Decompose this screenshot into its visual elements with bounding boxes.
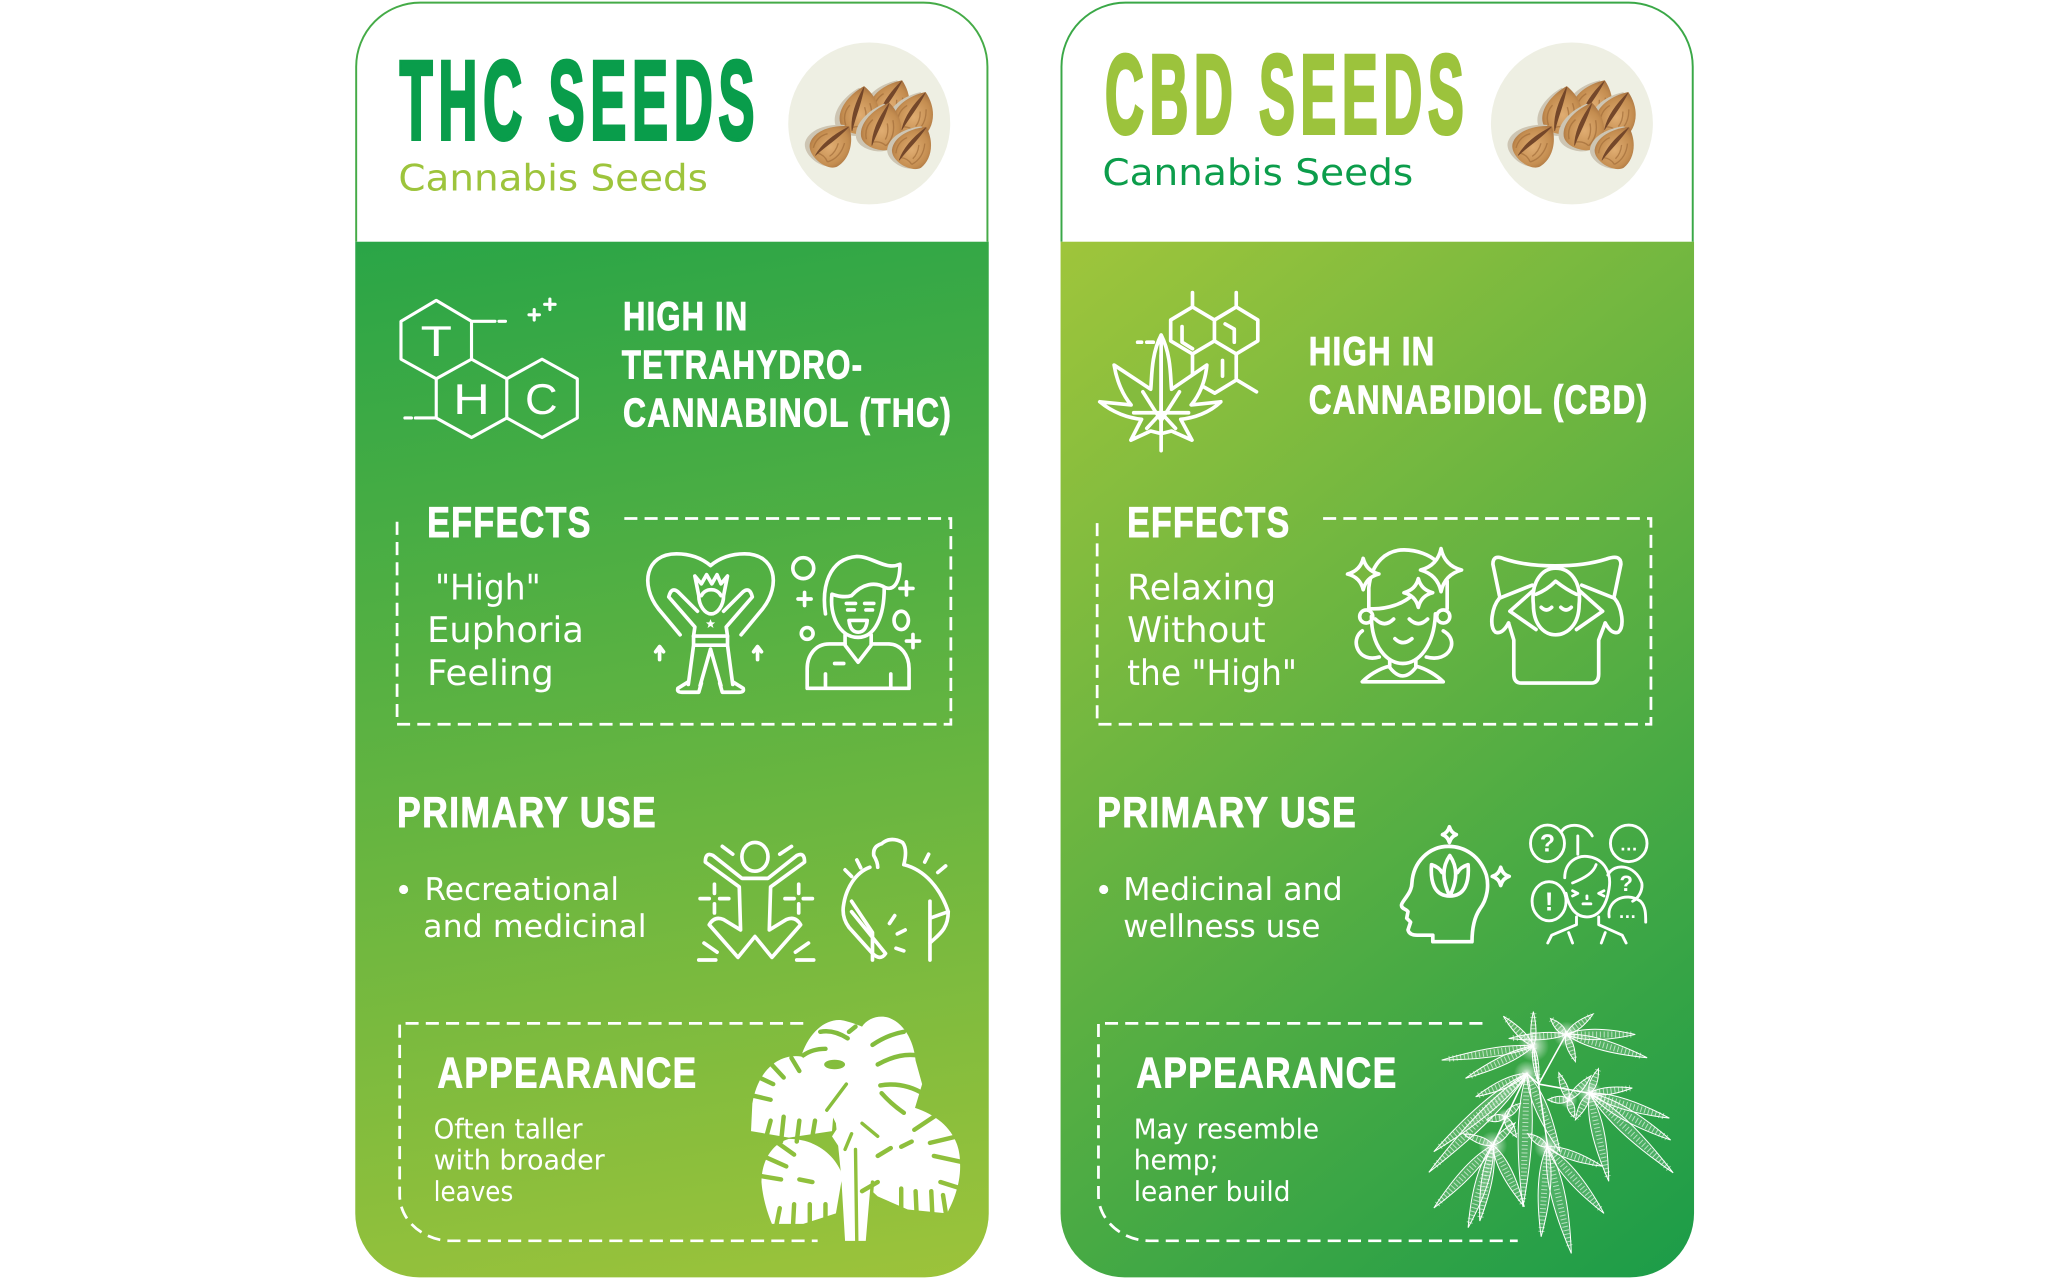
icon: man resting on pillow — [1492, 557, 1622, 683]
icon: stressed woman with speech bubbles — [1531, 825, 1647, 943]
icon: seeds in circle — [788, 42, 950, 204]
panel: THC seeds — [355, 3, 989, 1277]
text: effects description: Euphoria — [427, 611, 584, 651]
text: primary use bullet: Recreational — [424, 871, 619, 908]
text: effects description: Feeling — [427, 653, 554, 694]
text: appearance description: May resemble — [1134, 1113, 1319, 1145]
panel body gradient — [355, 242, 989, 1277]
icon: THC molecule: C — [525, 375, 558, 423]
icon: jumping person — [699, 842, 814, 960]
panel: THC seeds: THC SEEDS — [400, 39, 760, 164]
text: primary use bullet: Medicinal and — [1123, 871, 1343, 908]
icon: broad leaf plant — [751, 1016, 960, 1241]
text: primary use bullet: and medicinal — [423, 908, 647, 945]
icon: stressed woman with speech bubbles: ! — [1545, 888, 1553, 917]
text: appearance description — [1134, 1113, 1319, 1208]
icon: head with lotus — [1401, 827, 1509, 942]
icon: stressed woman with speech bubbles: … — [1618, 901, 1637, 922]
text: primary use bullet — [399, 871, 647, 945]
heading: appearance: APPEARANCE — [438, 1048, 697, 1097]
icon: cannabis plant line art — [1424, 1011, 1677, 1255]
icon: person in heart — [648, 554, 773, 692]
heading: effects: EFFECTS — [1127, 498, 1290, 546]
icon: relaxed woman with sparkles — [1348, 549, 1462, 682]
icon: THC molecule: T — [421, 317, 452, 365]
effects dashed frame — [397, 519, 951, 724]
panel body gradient — [1061, 242, 1694, 1277]
text: appearance description: with broader — [434, 1145, 605, 1176]
icon: THC molecule — [401, 299, 577, 438]
heading: high in THC: CANNABINOL (THC) — [623, 390, 952, 436]
icon: stressed woman with speech bubbles: … — [1620, 833, 1638, 854]
text: effects description: the "High" — [1127, 653, 1297, 694]
text: primary use bullet — [1099, 871, 1343, 945]
icon: happy man — [793, 556, 920, 688]
heading: high in CBD: HIGH IN — [1309, 328, 1435, 374]
icon: stressed woman with speech bubbles: ? — [1619, 871, 1633, 896]
text: primary use bullet: wellness use — [1123, 908, 1320, 945]
appearance dashed frame — [1098, 1023, 1518, 1241]
text: effects description: Without — [1127, 611, 1266, 651]
subtitle: Cannabis Seeds — [1102, 151, 1413, 194]
appearance dashed frame — [400, 1023, 818, 1241]
icon: man with back pain — [843, 839, 948, 960]
text: appearance description: leaner build — [1134, 1176, 1290, 1208]
text: effects description — [1127, 568, 1297, 694]
icon: CBD molecule with leaf — [1100, 293, 1258, 451]
text: effects description: Relaxing — [1127, 568, 1276, 609]
heading: appearance: APPEARANCE — [1136, 1048, 1398, 1097]
icon: THC molecule: H — [453, 375, 490, 423]
header outline — [356, 3, 987, 242]
panel: CBD seeds: CBD SEEDS — [1105, 32, 1469, 158]
subtitle: Cannabis Seeds — [398, 157, 708, 200]
header outline — [1061, 3, 1693, 242]
heading: high in THC: HIGH IN — [623, 293, 748, 339]
text: appearance description: leaves — [434, 1176, 513, 1208]
text: appearance description — [434, 1113, 605, 1208]
text: effects description: "High" — [435, 568, 541, 609]
panel: CBD seeds — [1061, 3, 1694, 1277]
heading: high in CBD — [1309, 328, 1648, 423]
heading: effects: EFFECTS — [427, 498, 592, 546]
heading: high in THC: TETRAHYDRO- — [622, 342, 863, 388]
text: effects description — [427, 568, 584, 694]
heading: primary use: PRIMARY USE — [397, 788, 657, 836]
heading: high in CBD: CANNABIDIOL (CBD) — [1309, 377, 1648, 423]
heading: high in THC — [622, 293, 952, 436]
icon: seeds in circle — [1491, 42, 1653, 204]
text: appearance description: Often taller — [434, 1113, 583, 1145]
heading: primary use: PRIMARY USE — [1097, 788, 1357, 836]
effects dashed frame — [1097, 519, 1651, 724]
icon: stressed woman with speech bubbles: ? — [1540, 831, 1555, 858]
text: appearance description: hemp; — [1134, 1145, 1219, 1176]
